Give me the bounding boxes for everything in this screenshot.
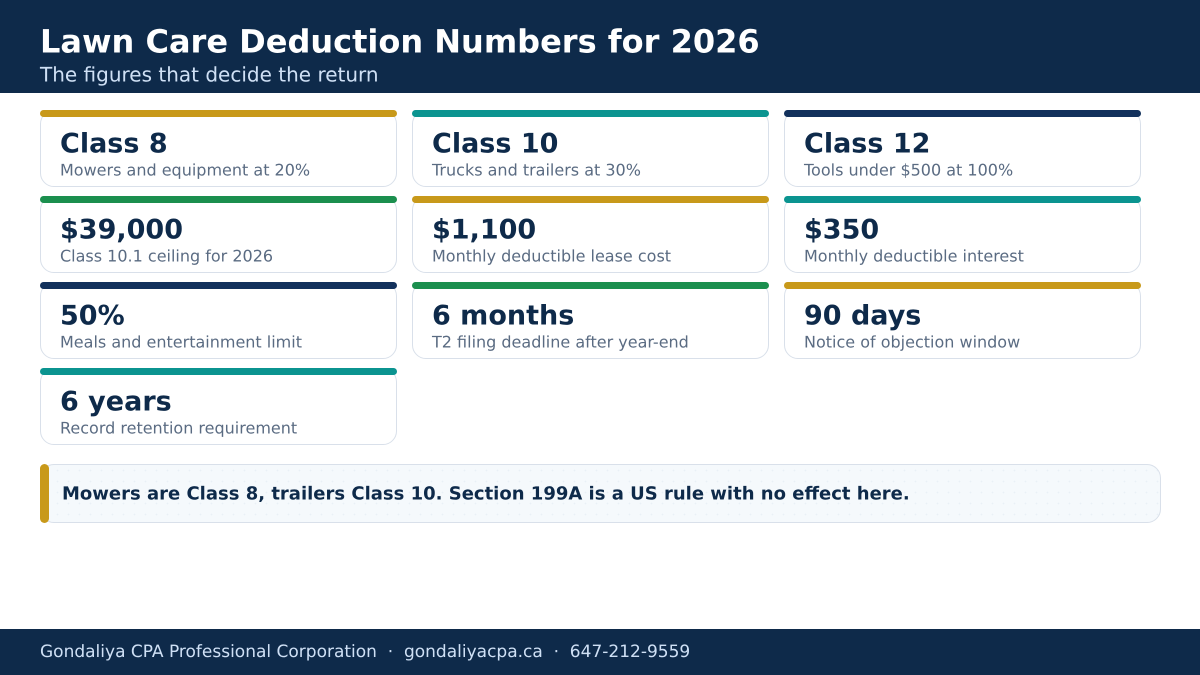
card: $1,100: $1,100 (432, 214, 536, 246)
card: $1,100: Monthly deductible lease cost (432, 246, 671, 266)
title: Lawn Care Deduction Numbers for 2026 (40, 22, 760, 60)
card: 50%: 50% (60, 300, 125, 332)
card: 6 months (412, 282, 769, 359)
card: Class 8: Class 8 (60, 128, 168, 160)
card: $350 (784, 196, 1141, 273)
card: 50% (40, 282, 397, 359)
card: $1,100 (412, 196, 769, 273)
card: 6 years: 6 years (60, 386, 172, 418)
card: Class 8: Mowers and equipment at 20% (60, 160, 310, 180)
footer text: Gondaliya CPA Professional Corporation · gondaliyacpa.ca · 647-212-9559 (40, 642, 690, 662)
card: 90 days (784, 282, 1141, 359)
footer band (0, 629, 1200, 675)
card: Class 12 (784, 110, 1141, 187)
card: Class 10 (412, 110, 769, 187)
card: $350: $350 (804, 214, 879, 246)
card: 6 months: 6 months (432, 300, 574, 332)
card: Class 10: Class 10 (432, 128, 558, 160)
card: 6 years: Record retention requirement (60, 418, 297, 438)
card: $350: Monthly deductible interest (804, 246, 1024, 266)
card: 6 years (40, 368, 397, 445)
card: 90 days: 90 days (804, 300, 921, 332)
callout accent bar (40, 464, 49, 523)
header band (0, 0, 1200, 93)
callout (40, 464, 1161, 523)
subtitle: The figures that decide the return (40, 62, 379, 86)
card: $39,000: Class 10.1 ceiling for 2026 (60, 246, 273, 266)
card: 90 days: Notice of objection window (804, 332, 1020, 352)
card: Class 12: Class 12 (804, 128, 930, 160)
card: $39,000 (40, 196, 397, 273)
card: Class 10: Trucks and trailers at 30% (432, 160, 641, 180)
card: Class 8 (40, 110, 397, 187)
callout text: Mowers are Class 8, trailers Class 10. Section 199A is a US rule with no effect here. (62, 484, 910, 504)
card: Class 12: Tools under $500 at 100% (804, 160, 1013, 180)
card: 6 months: T2 filing deadline after year-end (432, 332, 689, 352)
card: 50%: Meals and entertainment limit (60, 332, 302, 352)
card: $39,000: $39,000 (60, 214, 183, 246)
